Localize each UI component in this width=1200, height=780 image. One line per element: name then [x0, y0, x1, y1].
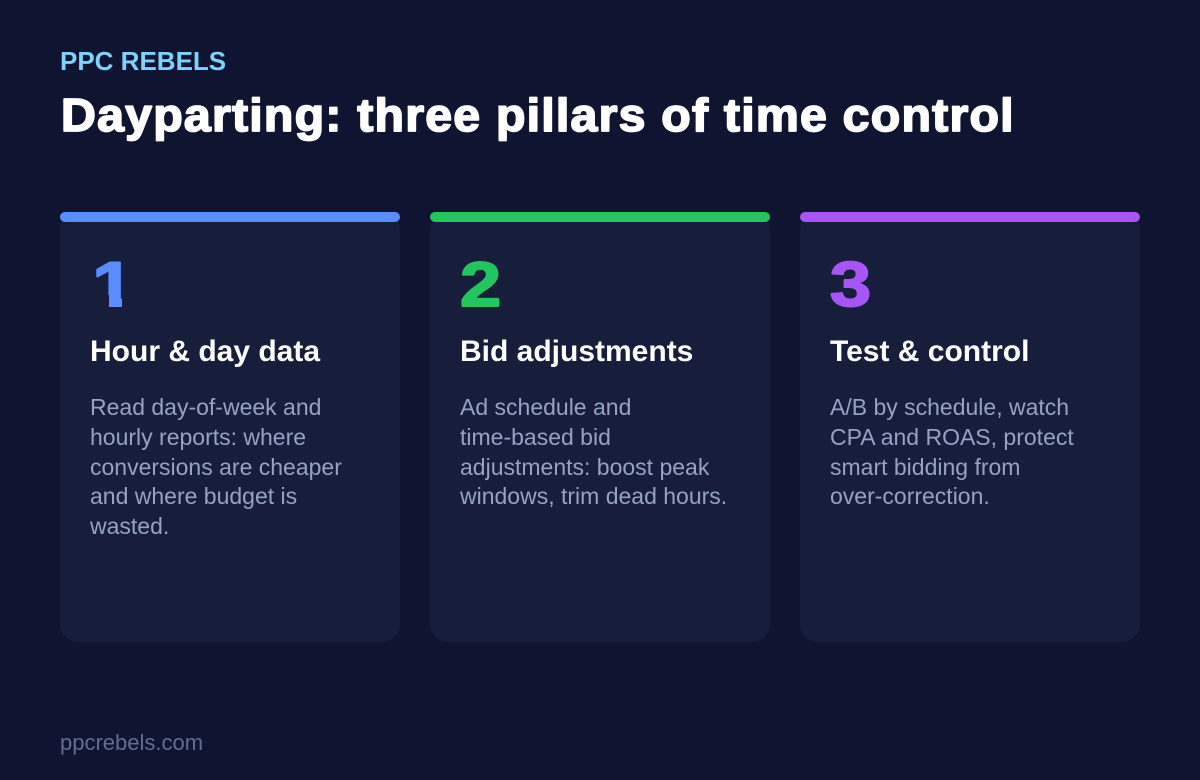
text: hour and day data: Read day-of-week and — [90, 394, 321, 420]
heading: hour and day data: Hour & day data — [90, 335, 320, 368]
text: bid adjustments: time-based bid — [460, 424, 611, 450]
text: test and control: A/B by schedule, watch — [830, 394, 1069, 420]
text: bid adjustments: Ad schedule and — [460, 394, 631, 420]
text: hour and day data — [90, 394, 342, 539]
title: Dayparting: three pillars of time control — [61, 89, 1015, 141]
text: test and control: over-correction. — [830, 483, 990, 509]
number 1: 1 — [92, 249, 133, 320]
brand label: PPC REBELS — [60, 46, 226, 76]
text: hour and day data: hourly reports: where — [90, 424, 306, 450]
number 2: 2 — [460, 249, 501, 320]
text: hour and day data: wasted. — [90, 513, 169, 539]
panel: test and control — [800, 212, 1140, 642]
text: test and control: CPA and ROAS, protect — [830, 424, 1074, 450]
accent bar: purple — [800, 212, 1140, 222]
text: hour and day data: and where budget is — [90, 483, 297, 509]
panel: bid adjustments — [430, 212, 770, 642]
text: test and control: smart bidding from — [830, 454, 1020, 480]
accent bar: green — [430, 212, 770, 222]
number 3: 3 — [830, 249, 871, 320]
text: test and control — [830, 394, 1074, 509]
panel: hour and day data — [60, 212, 400, 642]
accent bar: blue — [60, 212, 400, 222]
heading: bid adjustments: Bid adjustments — [460, 335, 693, 368]
heading: test and control: Test & control — [830, 335, 1029, 368]
text: bid adjustments — [460, 394, 727, 509]
text: hour and day data: conversions are cheaper — [90, 454, 342, 480]
text: bid adjustments: windows, trim dead hours. — [460, 483, 727, 509]
text: bid adjustments: adjustments: boost peak — [460, 454, 709, 480]
footer: ppcrebels.com — [60, 730, 203, 755]
